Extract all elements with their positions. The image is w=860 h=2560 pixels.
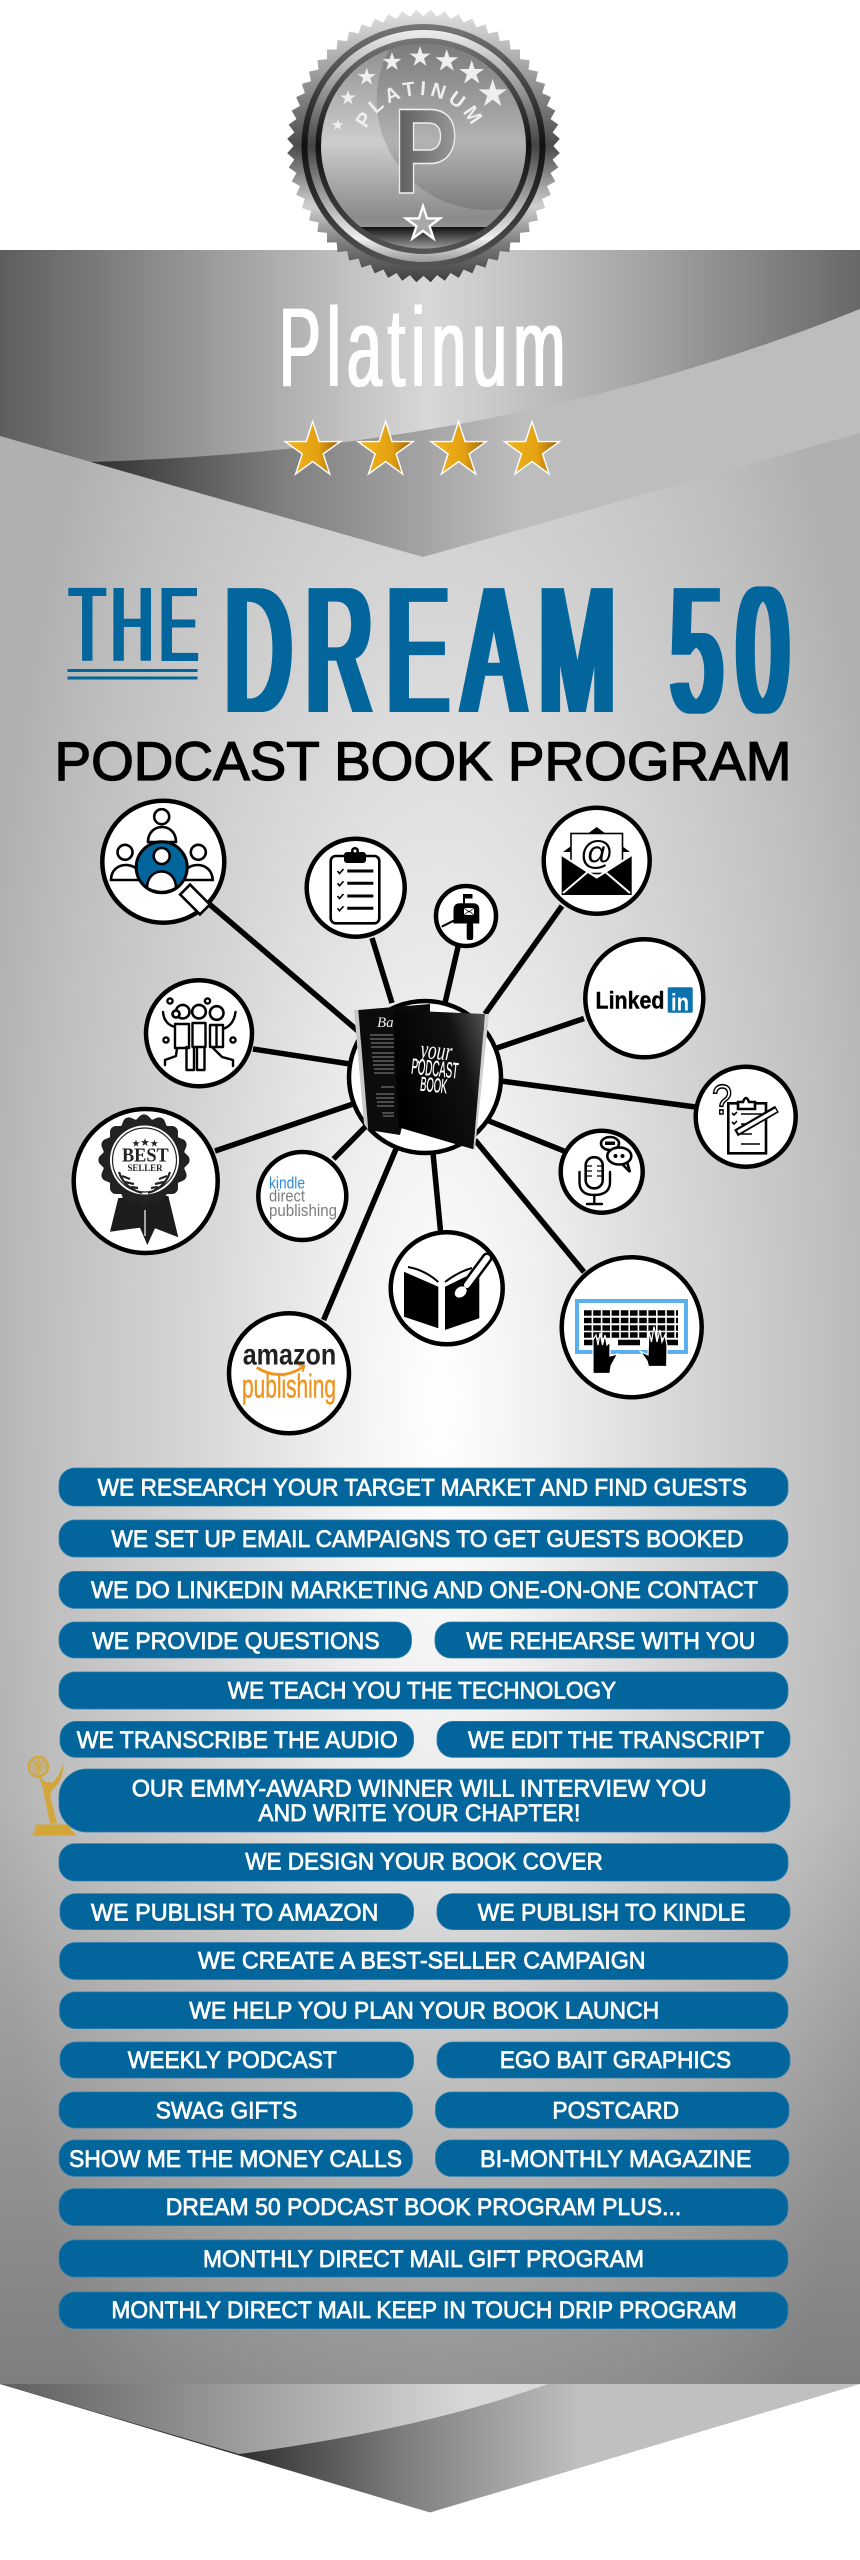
icon: amazon publishing logo [229, 1313, 349, 1433]
bottom chevron ribbon [0, 2384, 860, 2512]
pill: postcard [436, 2092, 789, 2128]
center circle with book: PODCAST [410, 1054, 460, 1083]
pill: transcribe audio: WE TRANSCRIBE THE AUDIO [77, 1727, 398, 1754]
icon: celebrating team [146, 980, 252, 1086]
pill: program plus [59, 2189, 788, 2226]
top banner ribbon [0, 250, 860, 570]
pill: publish amazon [60, 1894, 414, 1930]
icon: Emmy award statuette [28, 1757, 77, 1836]
icon: find guests magnifier [102, 801, 224, 923]
icon: book with paintbrush [391, 1232, 503, 1344]
pill: emmy award winner: AND WRITE YOUR CHAPTER! [258, 1800, 580, 1827]
icon: questions clipboard [696, 1067, 796, 1167]
pill: publish amazon: WE PUBLISH TO AMAZON [91, 1900, 378, 1927]
icon: kindle direct publishing logo: kindle [269, 1174, 305, 1192]
pill: email campaigns: WE SET UP EMAIL CAMPAIGNS TO GET GUESTS BOOKED [111, 1526, 743, 1553]
icon: microphone with speech bubbles [561, 1131, 643, 1213]
connector lines [206, 901, 695, 1320]
pill: design cover: WE DESIGN YOUR BOOK COVER [245, 1849, 603, 1876]
pill: direct mail drip: MONTHLY DIRECT MAIL KEEP IN TOUCH DRIP PROGRAM [111, 2297, 737, 2324]
pill: provide questions: WE PROVIDE QUESTIONS [92, 1628, 380, 1655]
pill: linkedin marketing: WE DO LINKEDIN MARKETING AND ONE-ON-ONE CONTACT [91, 1577, 758, 1604]
icon: kindle direct publishing logo: direct [269, 1188, 305, 1206]
subheading: PODCAST BOOK PROGRAM: PODCAST BOOK PROGRAM [54, 730, 792, 792]
icon: best seller ribbon [74, 1109, 218, 1253]
pill: publish kindle [437, 1894, 790, 1930]
book cover title [410, 1035, 460, 1098]
icon: email envelope: @ [580, 834, 613, 871]
pill: emmy award winner: OUR EMMY-AWARD WINNER WILL INTERVIEW YOU [132, 1775, 707, 1802]
pill: swag gifts [59, 2092, 412, 2128]
icon: best seller ribbon: SELLER [128, 1164, 163, 1174]
pill: provide questions [59, 1622, 412, 1658]
pill: edit transcript [437, 1721, 790, 1757]
pill: design cover [59, 1844, 788, 1881]
heading: THE: THE [70, 567, 204, 685]
icon: best seller ribbon: BEST [122, 1145, 169, 1167]
pill: rehearse [435, 1622, 788, 1658]
pill: emmy award winner [59, 1769, 790, 1832]
pill: edit transcript: WE EDIT THE TRANSCRIPT [468, 1727, 764, 1754]
icon: email envelope [544, 808, 650, 914]
pill: book launch [60, 1992, 788, 2029]
pill: research target market [59, 1468, 788, 1506]
icon: LinkedIn logo: Linked [596, 988, 664, 1014]
pill: program plus: DREAM 50 PODCAST BOOK PROGRAM PLUS... [166, 2194, 681, 2221]
icon: clipboard checklist [307, 839, 405, 937]
icon: typing on keyboard [562, 1257, 702, 1397]
pill: direct mail drip [59, 2292, 788, 2329]
pill: best-seller campaign: WE CREATE A BEST-SELLER CAMPAIGN [198, 1948, 646, 1975]
four gold rating stars [285, 422, 560, 474]
book cover title: BOOK [419, 1074, 449, 1098]
pill: direct mail gift [59, 2240, 788, 2277]
pill: linkedin marketing [59, 1571, 788, 1608]
pill: magazine: BI-MONTHLY MAGAZINE [480, 2146, 752, 2173]
icon: amazon publishing logo: amazon [243, 1338, 336, 1372]
pill: swag gifts: SWAG GIFTS [156, 2098, 297, 2125]
icon: amazon publishing logo: publishing [242, 1368, 336, 1405]
pill: teach technology: WE TEACH YOU THE TECHNOLOGY [228, 1678, 616, 1705]
pill: rehearse: WE REHEARSE WITH YOU [466, 1628, 755, 1655]
platinum seal badge [287, 10, 560, 282]
hub diagram [74, 801, 796, 1433]
pill: postcard: POSTCARD [552, 2098, 679, 2125]
pill: publish kindle: WE PUBLISH TO KINDLE [478, 1900, 746, 1927]
heading: DREAM 50: DREAM 50 [226, 550, 804, 751]
pill: teach technology [59, 1672, 788, 1709]
center circle with book [349, 1001, 501, 1153]
feature pill list [59, 1468, 790, 2329]
pill: ego bait graphics [437, 2042, 790, 2078]
pill: magazine [436, 2140, 789, 2176]
pill: ego bait graphics: EGO BAIT GRAPHICS [500, 2047, 731, 2074]
pill: book launch: WE HELP YOU PLAN YOUR BOOK LAUNCH [189, 1998, 659, 2025]
icon: kindle direct publishing logo [258, 1152, 346, 1240]
icon: LinkedIn logo: in [671, 990, 689, 1016]
pill: research target market: WE RESEARCH YOUR TARGET MARKET AND FIND GUESTS [98, 1474, 747, 1501]
icon: kindle direct publishing logo: publishing [269, 1202, 337, 1220]
pill: money calls: SHOW ME THE MONEY CALLS [69, 2146, 402, 2173]
book cover title: your [417, 1035, 454, 1066]
platinum seal badge: PLATINUM [355, 81, 482, 128]
platinum seal badge: P [393, 83, 458, 219]
pill: direct mail gift: MONTHLY DIRECT MAIL GIFT PROGRAM [203, 2246, 644, 2273]
banner title: Platinum: Platinum [279, 286, 571, 411]
main silver panel [0, 433, 860, 2384]
icon: LinkedIn logo [585, 939, 703, 1057]
icon: questions clipboard: ? [712, 1076, 732, 1123]
center circle with book: Bac [377, 1015, 401, 1031]
pill: email campaigns [59, 1520, 788, 1557]
pill: weekly podcast: WEEKLY PODCAST [128, 2047, 337, 2074]
pill: weekly podcast [60, 2042, 414, 2078]
icon: mailbox [436, 886, 496, 946]
pill: best-seller campaign [60, 1942, 788, 1980]
